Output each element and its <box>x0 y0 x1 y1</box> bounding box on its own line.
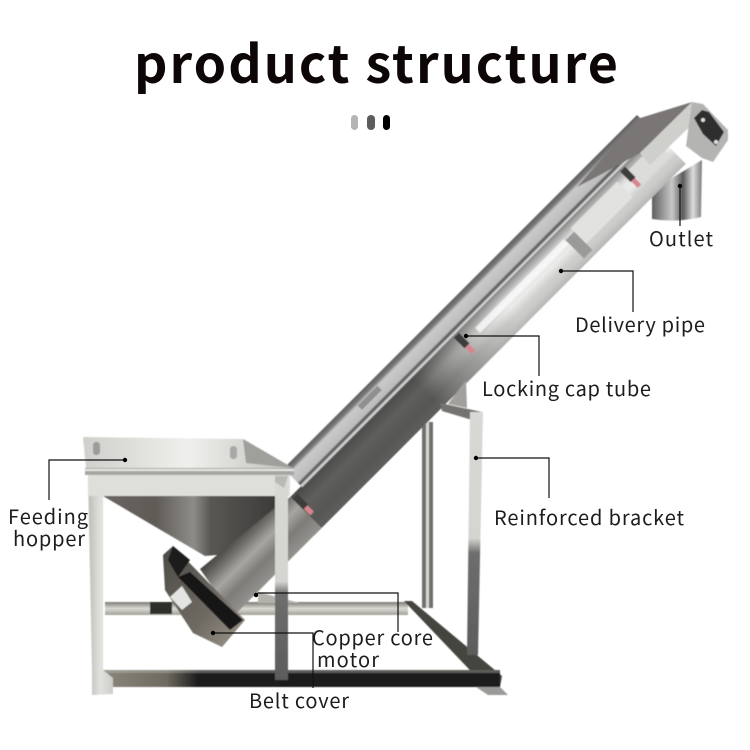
conveyor pipe and cover <box>184 102 728 616</box>
decorative dots under title <box>351 115 390 130</box>
illustration: screw conveyor <box>83 102 728 695</box>
label: Reinforced bracket <box>474 456 684 531</box>
end flange <box>686 102 728 162</box>
top sheet <box>577 102 692 187</box>
rear base frame <box>105 422 502 687</box>
label: Copper core motor <box>254 593 433 673</box>
feeding hopper body <box>103 496 277 556</box>
label: Locking cap tube <box>464 334 651 402</box>
top cover <box>283 115 656 488</box>
delivery pipe <box>283 133 686 535</box>
title: product structure <box>134 23 618 98</box>
label: Delivery pipe <box>559 269 705 338</box>
locking caps <box>293 167 642 516</box>
belt cover <box>163 546 245 647</box>
pipe plates <box>562 142 679 259</box>
outlet <box>652 160 702 221</box>
label: Belt cover <box>211 631 349 714</box>
label: Outlet <box>649 184 713 252</box>
cover lettering strip <box>358 386 382 410</box>
label: Belt cover: Belt cover <box>249 685 349 714</box>
reinforced bracket <box>440 380 483 655</box>
hopper tray <box>83 437 294 475</box>
label: Delivery pipe: Delivery pipe <box>575 309 705 338</box>
label: Feeding hopper: hopper <box>13 523 85 552</box>
label: Feeding hopper: Feeding <box>8 501 88 530</box>
lower tube <box>193 488 322 616</box>
label: Copper core motor: motor <box>317 644 379 673</box>
label: Copper core motor: Copper core <box>312 622 433 651</box>
label: Locking cap tube: Locking cap tube <box>482 373 651 402</box>
front base frame <box>103 670 508 695</box>
front legs <box>88 475 290 695</box>
label: Feeding hopper <box>8 458 127 552</box>
label: Reinforced bracket: Reinforced bracket <box>494 502 684 531</box>
label: Outlet: Outlet <box>649 223 713 252</box>
